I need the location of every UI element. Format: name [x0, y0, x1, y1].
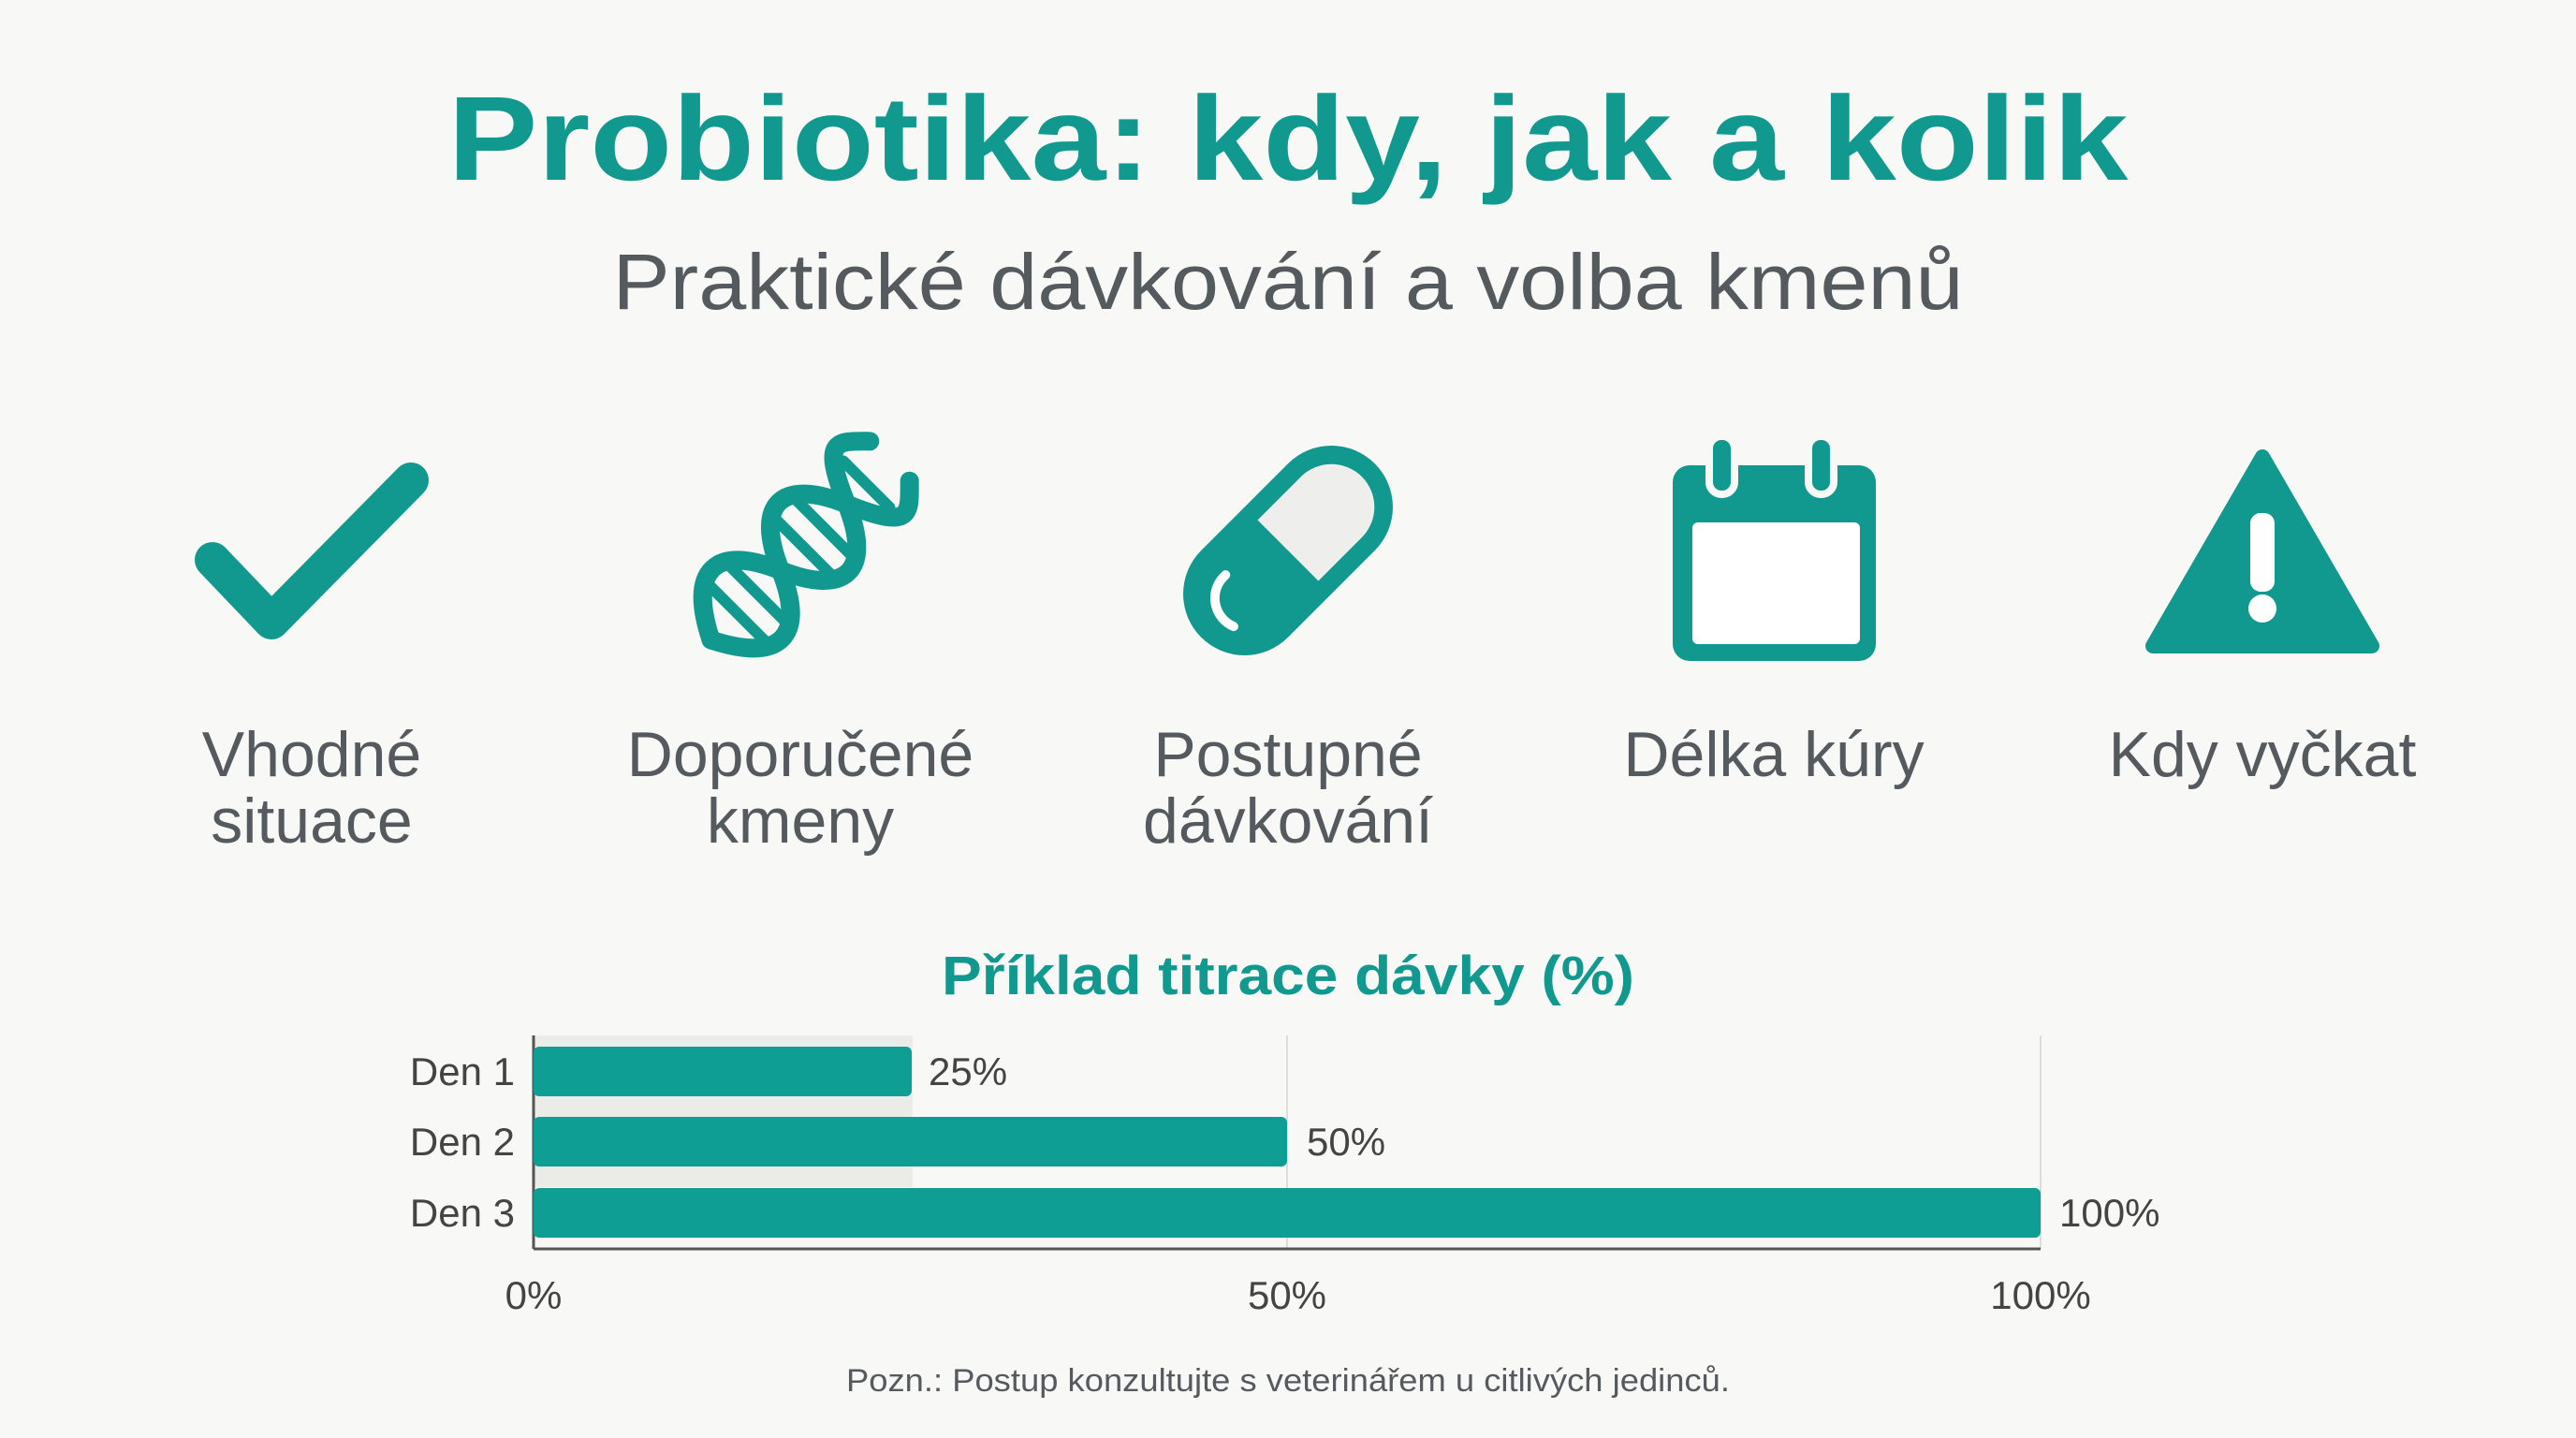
label: Vhodné situace: situace	[211, 785, 413, 857]
label: Vhodné situace	[202, 719, 421, 857]
bar: Den 1	[410, 1047, 1007, 1096]
label: Doporučené kmeny	[627, 719, 973, 857]
axis labels: 100%	[1990, 1273, 2091, 1317]
title: Probiotika: kdy, jak a kolik	[447, 72, 2129, 206]
bar: Den 2: 50%	[1307, 1120, 1385, 1164]
footnote: Pozn.: Postup konzultujte s veterinářem u citlivých jedinců.	[846, 1363, 1730, 1399]
icon: pill	[1158, 420, 1418, 681]
icon: checkmark	[212, 480, 411, 622]
bar: Den 3: Den 3	[410, 1191, 515, 1235]
bar: Den 2	[410, 1117, 1385, 1167]
label: Délka kúry: Délka kúry	[1623, 719, 1925, 790]
subtitle: Praktické dávkování a volba kmenů	[612, 238, 1964, 326]
icon: warning	[2153, 457, 2372, 646]
icon: DNA	[676, 426, 925, 675]
axis labels: 0%	[505, 1273, 562, 1317]
axis labels	[505, 1273, 2091, 1317]
icon: calendar	[1673, 436, 1876, 661]
label: Postupné dávkování	[1143, 719, 1433, 857]
label: Doporučené kmeny: kmeny	[707, 785, 894, 857]
axis labels: 50%	[1248, 1273, 1326, 1317]
bar: Den 1: 25%	[929, 1049, 1007, 1093]
label: Postupné dávkování: dávkování	[1143, 785, 1433, 857]
label: Postupné dávkování: Postupné	[1153, 719, 1423, 790]
bar: Den 3: 100%	[2059, 1191, 2159, 1235]
bar: Den 2: Den 2	[410, 1120, 515, 1164]
bar: Den 3	[410, 1188, 2159, 1238]
chart title: Příklad titrace dávky (%)	[942, 946, 1634, 1006]
label: Kdy vyčkat: Kdy vyčkat	[2109, 719, 2416, 790]
bar: Den 1: Den 1	[410, 1049, 515, 1093]
bar chart	[410, 1035, 2159, 1317]
label: Doporučené kmeny: Doporučené	[627, 719, 973, 790]
label: Vhodné situace: Vhodné	[202, 719, 421, 790]
